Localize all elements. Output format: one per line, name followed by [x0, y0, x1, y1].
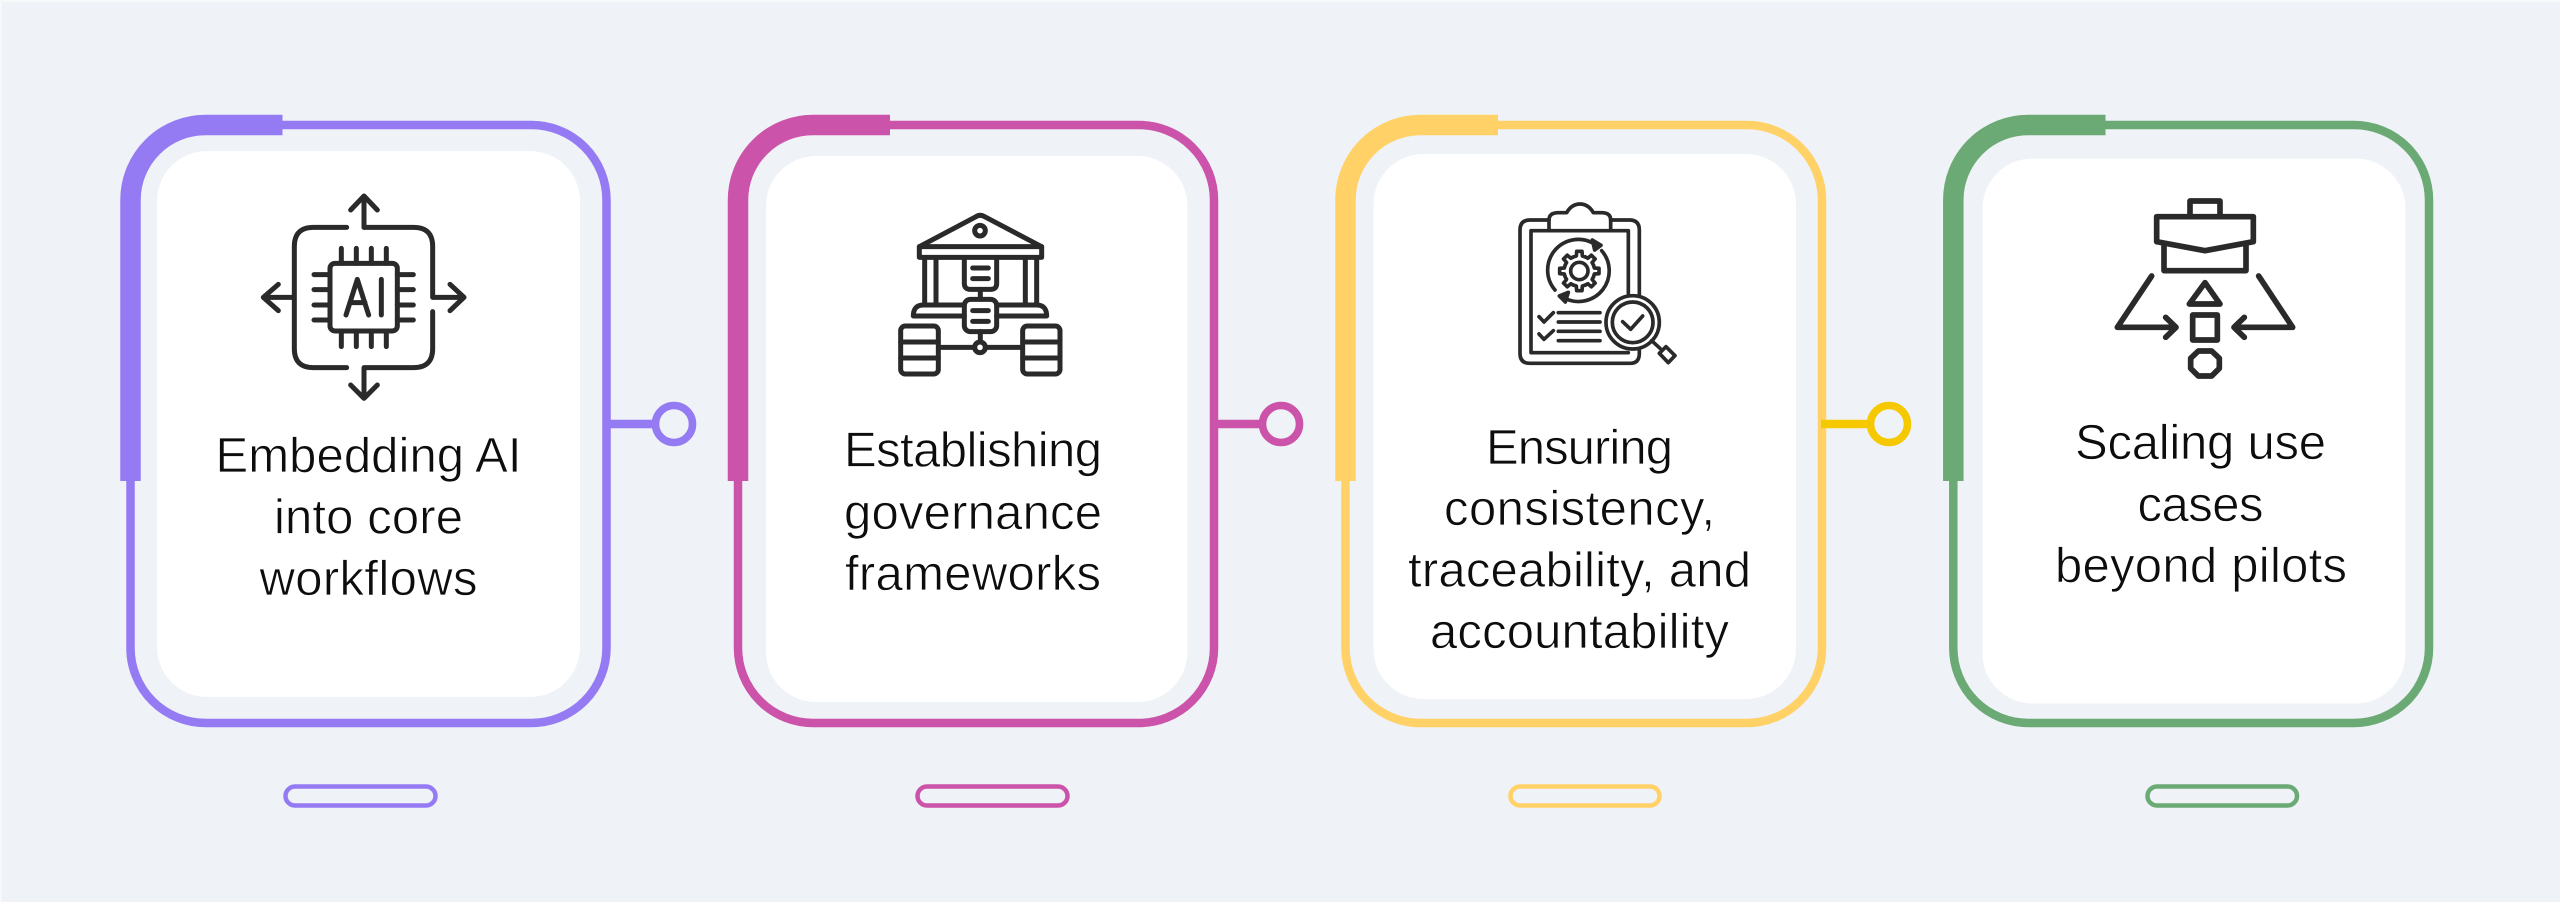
- panel: scaling: [1953, 125, 2429, 806]
- thick frame accent: [738, 125, 890, 481]
- label: [216, 429, 522, 606]
- thick frame accent: [130, 125, 282, 481]
- icon: AI chip with arrows: [263, 196, 464, 398]
- label: accountability: [1430, 605, 1730, 659]
- pill: [918, 786, 1068, 806]
- label: [844, 424, 1102, 601]
- label: [2055, 416, 2347, 593]
- white card: [1374, 154, 1796, 699]
- white card: [1982, 158, 2406, 704]
- connector line and ring: [1214, 406, 1300, 442]
- card frame: [738, 125, 1214, 723]
- pill: [286, 786, 436, 806]
- connector line and ring: [606, 406, 692, 442]
- icon: briefcase with shapes: [2117, 201, 2293, 376]
- card frame: [1953, 125, 2429, 723]
- white card: [157, 151, 580, 697]
- pill: [2148, 786, 2297, 806]
- label: Embedding AI: [216, 429, 522, 483]
- label: into core: [274, 490, 463, 544]
- label: cases: [2138, 478, 2264, 532]
- label: consistency,: [1444, 482, 1715, 536]
- label: frameworks: [845, 547, 1101, 601]
- thick frame accent: [1953, 125, 2106, 481]
- panel: embedding AI: [130, 125, 692, 806]
- label: Establishing: [844, 424, 1102, 478]
- panel: governance: [738, 125, 1300, 806]
- label: workflows: [258, 552, 478, 606]
- thick frame accent: [1346, 125, 1498, 481]
- connector line and ring: [1821, 406, 1908, 442]
- pill: [1510, 786, 1660, 806]
- card frame: [130, 125, 606, 723]
- label: governance: [844, 486, 1102, 540]
- panel: consistency: [1346, 125, 1908, 806]
- white card: [766, 156, 1188, 702]
- label: [1408, 421, 1751, 659]
- label: Scaling use: [2075, 416, 2326, 470]
- icon: clipboard with gear and magnifier: [1520, 204, 1675, 363]
- label: Ensuring: [1486, 421, 1673, 475]
- icon: institution and data flow: [901, 215, 1060, 374]
- card frame: [1346, 125, 1822, 723]
- label: beyond pilots: [2055, 539, 2347, 593]
- label: traceability, and: [1408, 544, 1751, 598]
